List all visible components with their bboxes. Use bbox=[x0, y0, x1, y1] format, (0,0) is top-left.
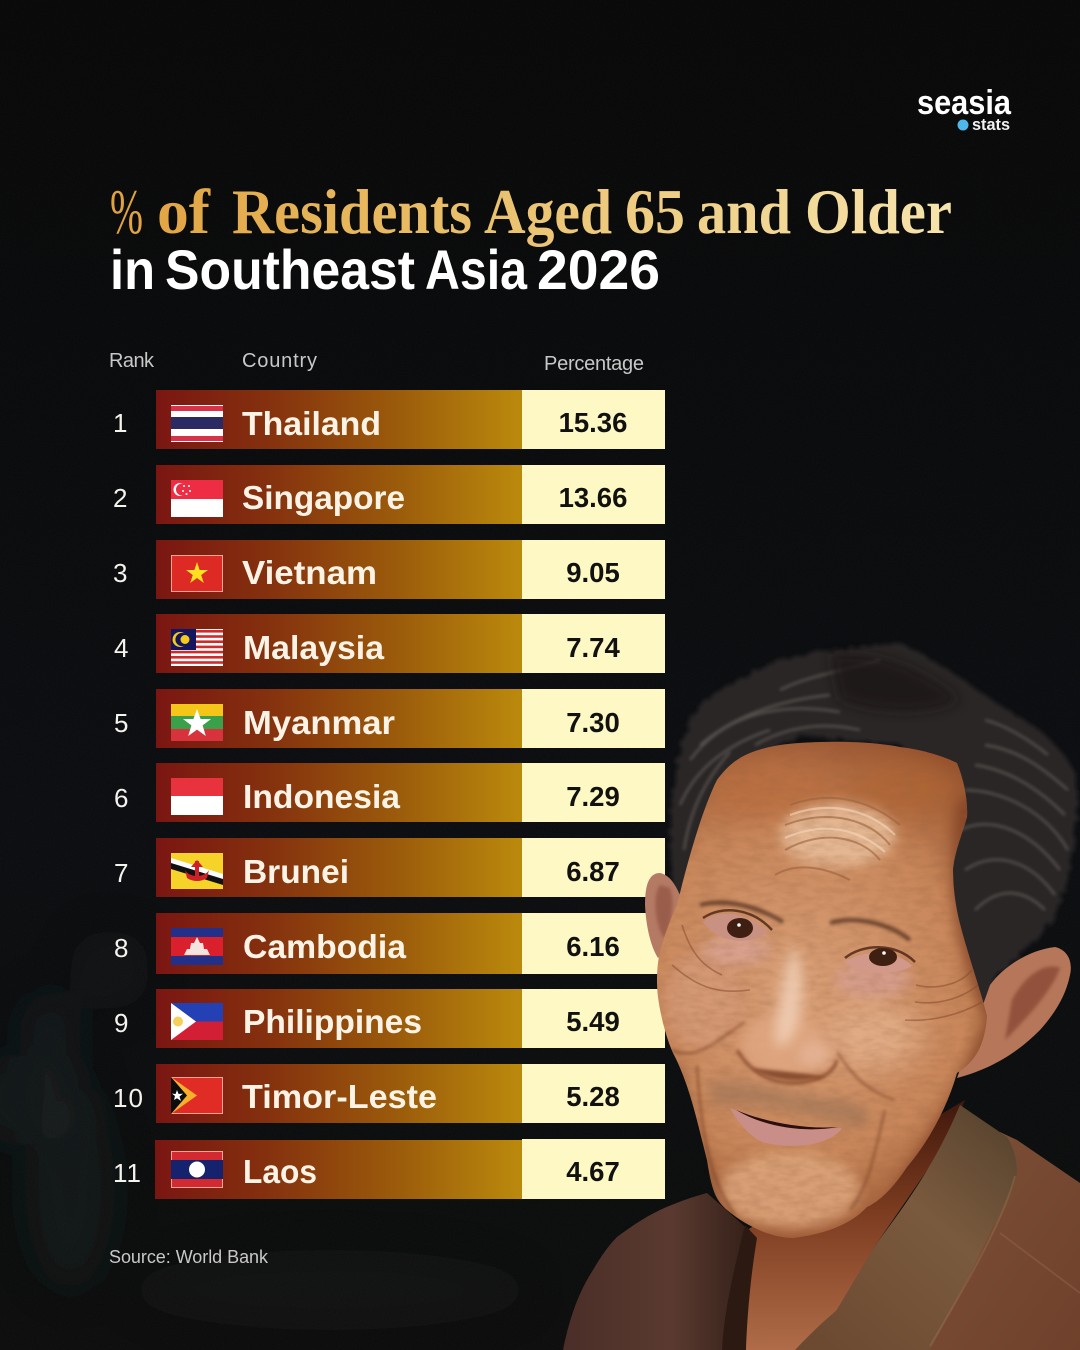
eye wrinkles bbox=[672, 925, 982, 1020]
column headers: Rank bbox=[109, 350, 155, 372]
row 2: Singapore: 13.66 bbox=[559, 482, 627, 513]
row 7: Brunei: 6.87 bbox=[566, 856, 620, 887]
eyebrows bbox=[700, 903, 910, 940]
row 9: Philippines: 5.49 bbox=[566, 1006, 620, 1037]
row 1: Thailand: 1 bbox=[113, 408, 127, 438]
row 10: Timor-Leste bbox=[113, 1064, 665, 1123]
jacket bbox=[563, 1100, 1080, 1350]
row 11: Laos bbox=[113, 1139, 665, 1199]
flag: Malaysia bbox=[171, 629, 223, 666]
portrait: elderly man bbox=[563, 643, 1080, 1350]
column headers: Country bbox=[242, 350, 317, 372]
title: % bbox=[110, 176, 143, 247]
row 4: Malaysia: Malaysia bbox=[243, 629, 385, 666]
row 6: Indonesia: Indonesia bbox=[243, 778, 401, 815]
row 1: Thailand: 15.36 bbox=[559, 407, 627, 438]
row 7: Brunei: Brunei bbox=[243, 853, 349, 890]
flag: Philippines bbox=[171, 1003, 223, 1040]
row 5: Myanmar: 7.30 bbox=[566, 707, 620, 738]
row 10: Timor-Leste: 5.28 bbox=[566, 1081, 620, 1112]
title: of bbox=[157, 176, 211, 247]
row 4: Malaysia: 4 bbox=[114, 633, 128, 663]
flag: Brunei bbox=[171, 853, 223, 889]
left ear bbox=[645, 873, 682, 958]
row 3: Vietnam bbox=[113, 540, 665, 599]
flag: Myanmar bbox=[171, 704, 223, 741]
flag: Vietnam bbox=[172, 556, 222, 592]
row 8: Cambodia: 8 bbox=[114, 933, 128, 963]
row 10: Timor-Leste: Timor-Leste bbox=[242, 1078, 437, 1115]
title bbox=[110, 176, 952, 301]
row 7: Brunei bbox=[114, 838, 665, 897]
hair bbox=[671, 643, 1078, 1022]
row 3: Vietnam: 9.05 bbox=[566, 557, 620, 588]
row 1: Thailand bbox=[113, 390, 665, 449]
row 7: Brunei: 7 bbox=[114, 858, 128, 888]
flag: Laos bbox=[171, 1152, 223, 1188]
face bbox=[656, 742, 987, 1238]
row 2: Singapore: Singapore bbox=[242, 479, 405, 516]
flag: Timor-Leste bbox=[171, 1077, 222, 1114]
title: 2026 bbox=[537, 238, 660, 301]
row 11: Laos: 11 bbox=[113, 1158, 141, 1188]
title: in bbox=[110, 238, 155, 301]
nose bbox=[737, 950, 837, 1083]
title: Older bbox=[805, 176, 952, 247]
row 9: Philippines bbox=[114, 989, 665, 1048]
face shading bbox=[700, 760, 840, 820]
title: Southeast bbox=[165, 238, 415, 301]
title: Asia bbox=[425, 238, 528, 301]
row 9: Philippines: 9 bbox=[114, 1008, 128, 1038]
flag: Indonesia bbox=[171, 778, 223, 815]
row 9: Philippines: Philippines bbox=[243, 1003, 422, 1040]
flag: Cambodia bbox=[171, 928, 223, 965]
mouth bbox=[730, 1108, 842, 1146]
row 5: Myanmar: 5 bbox=[114, 708, 128, 738]
left eye bbox=[703, 910, 772, 941]
source note: Source: World Bank bbox=[109, 1247, 269, 1267]
row 2: Singapore: 2 bbox=[113, 483, 127, 513]
row 3: Vietnam: Vietnam bbox=[242, 554, 377, 591]
column headers: Percentage bbox=[544, 353, 644, 375]
logo: seasia stats: stats bbox=[972, 115, 1010, 134]
row 2: Singapore bbox=[113, 465, 665, 524]
ranking table bbox=[113, 390, 665, 1199]
cheek fold and jaw bbox=[672, 1022, 895, 1215]
flag: Thailand bbox=[171, 405, 223, 442]
right eye bbox=[845, 947, 915, 973]
title: Aged bbox=[484, 176, 612, 247]
row 11: Laos: Laos bbox=[243, 1153, 317, 1190]
row 4: Malaysia: 7.74 bbox=[566, 632, 620, 663]
title: 65 bbox=[625, 176, 685, 247]
row 6: Indonesia bbox=[114, 763, 665, 822]
row 5: Myanmar: Myanmar bbox=[243, 704, 395, 741]
logo: seasia stats: seasia bbox=[917, 84, 1012, 122]
row 5: Myanmar bbox=[114, 689, 665, 748]
row 3: Vietnam: 3 bbox=[113, 558, 127, 588]
column headers bbox=[109, 350, 644, 375]
flag: Singapore bbox=[171, 480, 223, 517]
title: and bbox=[697, 176, 791, 247]
title: Residents bbox=[232, 176, 472, 247]
forehead wrinkles bbox=[775, 798, 900, 880]
row 6: Indonesia: 7.29 bbox=[566, 781, 620, 812]
moustache bbox=[706, 1081, 872, 1126]
right ear bbox=[957, 947, 1071, 1078]
row 10: Timor-Leste: 10 bbox=[113, 1083, 143, 1113]
row 8: Cambodia: 6.16 bbox=[566, 931, 620, 962]
row 8: Cambodia: Cambodia bbox=[243, 928, 407, 965]
row 8: Cambodia bbox=[114, 913, 665, 974]
row 1: Thailand: Thailand bbox=[242, 405, 381, 442]
row 11: Laos: 4.67 bbox=[566, 1156, 620, 1187]
row 4: Malaysia bbox=[114, 614, 665, 673]
row 6: Indonesia: 6 bbox=[114, 783, 128, 813]
